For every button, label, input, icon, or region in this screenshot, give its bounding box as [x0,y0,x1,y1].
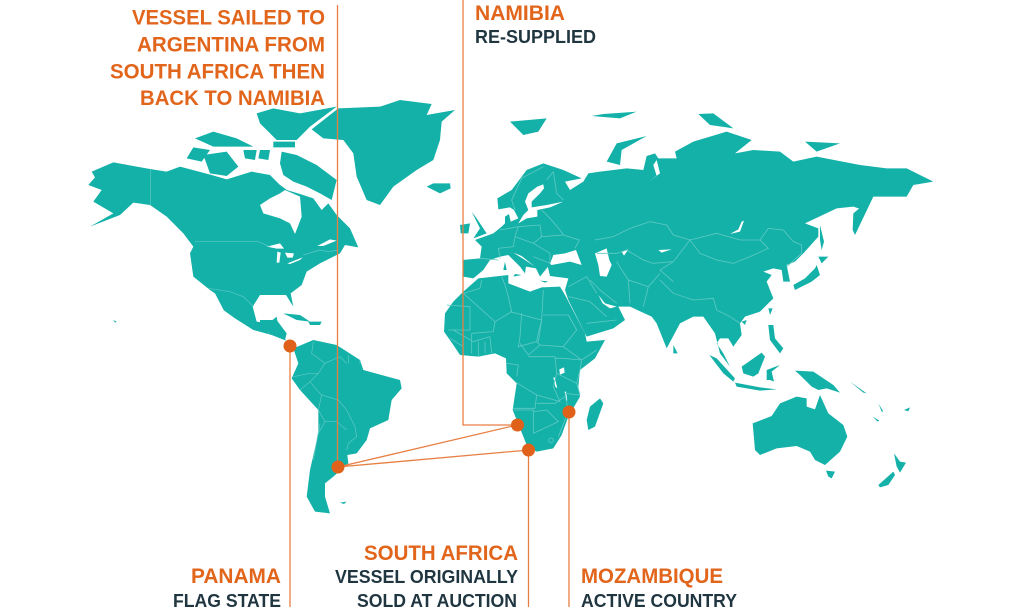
callout: Mozambique [581,564,737,611]
callout: vessel sailed to Argentina: VESSEL SAILED TO [132,6,325,30]
callout: Panama: FLAG STATE [173,591,281,611]
water: Hudson Bay and Great Lakes [210,190,337,313]
line: Mozambique leader [568,412,570,607]
callout: vessel sailed to Argentina: SOUTH AFRICA THEN [110,60,325,84]
callout: vessel sailed to Argentina [110,6,325,110]
location markers [284,340,576,474]
marker: Mozambique [562,406,576,418]
callout: Panama: PANAMA [191,564,281,588]
Arctic islands [280,152,337,200]
line: Panama leader [289,346,291,607]
line: Namibia leader [463,0,517,425]
callout: South Africa: SOLD AT AUCTION [357,591,517,611]
callout: South Africa [335,541,518,611]
callout: Panama [173,564,281,611]
callout: South Africa: SOUTH AFRICA [364,541,518,565]
line: Argentina leader [336,5,338,467]
country borders [151,169,338,333]
callout: vessel sailed to Argentina: BACK TO NAMIBIA [140,86,325,110]
landmass: Australasia and Indonesia [709,353,910,487]
marker: Panama [284,340,296,352]
marker: South Africa [522,444,535,456]
line: Argentina to Namibia [338,425,517,467]
callout: Namibia: NAMIBIA [475,1,565,25]
route lines [290,0,569,607]
callout: vessel sailed to Argentina: ARGENTINA FROM [137,32,325,56]
country borders [447,277,597,443]
landmass: Eurasia [460,112,933,367]
world map [88,100,933,513]
callout: Namibia [475,1,596,47]
callout: South Africa: VESSEL ORIGINALLY [335,567,518,587]
callout: Mozambique: MOZAMBIQUE [581,564,723,588]
callout: Mozambique: ACTIVE COUNTRY [581,591,737,611]
landmass: North America and Greenland [88,100,455,341]
line: Argentina to South Africa [338,450,529,467]
line: South Africa leader [528,450,530,607]
landmass: South America and Madagascar [260,320,603,513]
marker: Namibia [511,418,524,432]
country borders [480,167,802,323]
callout: Namibia: RE-SUPPLIED [475,27,596,47]
country borders [293,342,360,460]
landmass: Africa [444,275,605,452]
water: African lakes [553,367,567,401]
marker: Argentina [332,460,344,474]
water: inland seas [513,160,744,308]
